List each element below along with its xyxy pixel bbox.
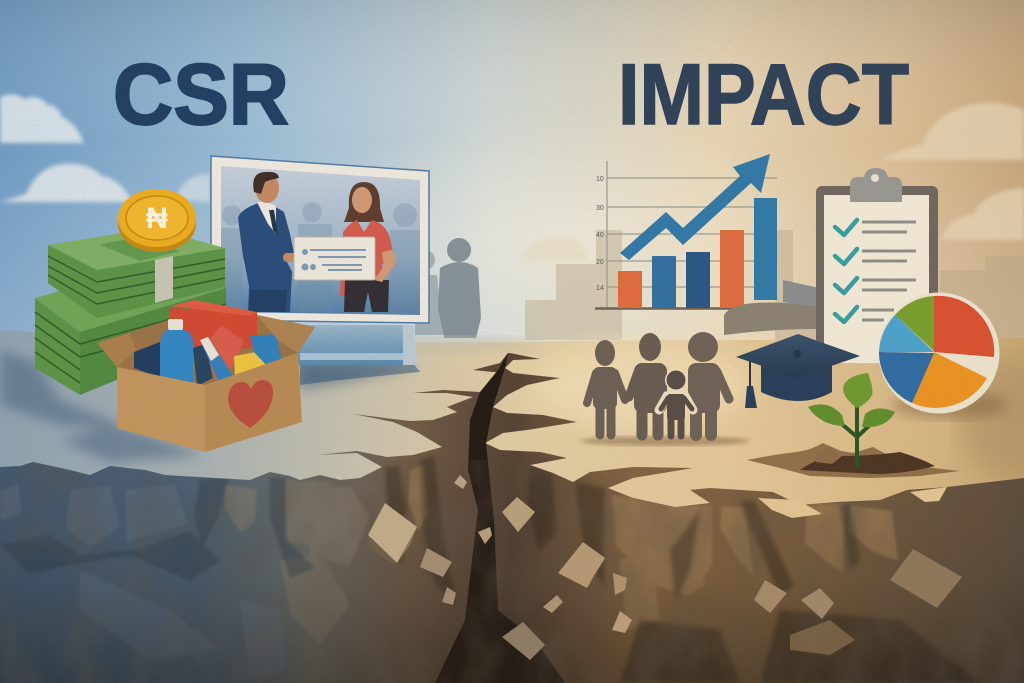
bar chart with rising arrow: 40	[596, 232, 604, 239]
bar chart with rising arrow: 10	[596, 176, 604, 183]
pie chart	[878, 292, 1008, 419]
heart	[228, 380, 273, 428]
graduation cap	[736, 334, 860, 408]
woman in red	[340, 182, 396, 312]
bar chart with rising arrow	[595, 154, 777, 309]
rising arrow	[620, 154, 770, 260]
upper bundle	[48, 228, 225, 318]
distant city silhouette	[525, 230, 1024, 340]
donation box with heart	[97, 300, 315, 452]
green sprout	[808, 373, 895, 465]
soil mound	[747, 443, 960, 478]
box inside and flaps	[97, 315, 315, 385]
title: IMPACT: IMPACT	[618, 47, 909, 143]
rock 7	[558, 542, 605, 588]
title: CSR: CSR	[113, 47, 289, 143]
adult 3	[688, 332, 729, 435]
family ground shadow	[580, 436, 750, 446]
rock 1	[368, 503, 417, 563]
child	[659, 369, 693, 436]
cracked ground surface	[0, 330, 1024, 683]
gold naira coin: ₦	[146, 202, 168, 235]
crowd silhouettes	[221, 202, 420, 314]
billboard with cheque presentation photo	[211, 156, 429, 365]
family silhouettes	[580, 332, 750, 446]
stacked cash bundles	[35, 228, 226, 395]
adult 1	[587, 340, 625, 435]
gold naira coin	[118, 189, 196, 252]
central chasm	[435, 353, 565, 683]
clouds left	[0, 94, 210, 202]
cliff face rock texture	[0, 456, 980, 683]
adult 2	[629, 333, 663, 435]
billboard shadow	[300, 363, 420, 385]
background sky	[0, 0, 1024, 370]
shadow figures right of billboard	[415, 238, 481, 338]
bar chart with rising arrow: 30	[596, 205, 604, 212]
check marks	[835, 220, 857, 322]
man in suit	[238, 172, 297, 312]
bar chart with rising arrow: 14	[596, 285, 604, 292]
ground shadows left	[0, 350, 415, 462]
bar chart with rising arrow: 20	[596, 259, 604, 266]
checklist clipboard	[816, 168, 938, 363]
cliff face	[0, 353, 1024, 683]
box contents	[134, 319, 282, 386]
clouds right	[520, 103, 1024, 262]
red carton	[170, 300, 257, 357]
grey rubble block behind chart	[724, 280, 819, 335]
lower bundle	[35, 288, 226, 395]
fallen rocks	[368, 475, 962, 660]
cliff mottling	[0, 460, 1024, 683]
cliff shadow gradient	[0, 504, 1024, 683]
light slab patches on right rim	[758, 487, 947, 518]
billboard stand	[295, 325, 417, 365]
cheque	[294, 237, 375, 280]
